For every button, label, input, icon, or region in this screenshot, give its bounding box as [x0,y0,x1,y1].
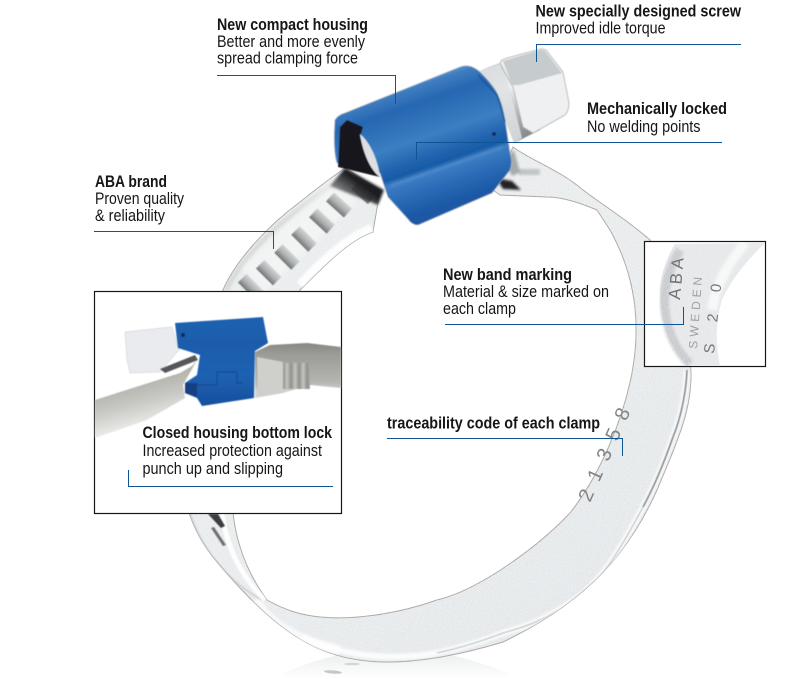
inset left band [95,360,197,438]
callout: ABA brand: ABA brand [95,172,167,191]
band slots [238,183,374,299]
dark shadow beneath housing [330,168,384,205]
inset callout: Closed housing bottom lock [142,423,332,442]
inset callout [128,423,333,486]
callout: new compact housing [217,15,396,104]
embossed marking text: SWEDEN [686,276,705,349]
inset callout: punch up and slipping [142,460,283,478]
callout: traceability code: traceability code of each clamp [387,414,600,432]
blue housing [334,66,512,225]
zoom panel: band marking detail [644,242,766,366]
callout: new band marking [443,265,684,324]
callout: mechanically locked: No welding points [587,118,700,136]
callout: new band marking: New band marking [443,265,572,284]
lower band slashes [208,514,226,546]
embossed marking text: ABA [665,256,688,300]
callout: traceability code [387,414,622,456]
inset panel: closed housing bottom lock [94,292,342,514]
callout: specially designed screw [536,2,742,62]
inset screw head [125,327,179,373]
callout: new compact housing: Better and more evenly [217,33,366,51]
callout: ABA brand: Proven quality [95,190,185,208]
embossed marking text: S 2 0 [701,283,725,354]
inset right band [255,343,341,398]
inset callout: Increased protection against [142,442,322,460]
reflection under clamp [270,649,522,679]
housing opening [338,120,380,177]
callout: new band marking: Material & size marked on [443,283,609,301]
housing ridge highlight [391,147,503,186]
callout: specially designed screw: Improved idle torque [536,20,666,38]
callout: mechanically locked: Mechanically locked [587,99,727,118]
callout: mechanically locked [416,99,727,160]
embossed traceability number: 21358 [574,405,635,505]
callout: new compact housing: New compact housing [217,15,368,34]
screw end in opening [360,134,380,177]
embossed marking text [665,256,725,354]
callout: specially designed screw: New specially designed screw [536,2,742,20]
callout: ABA brand [94,172,274,249]
tail strap shading [496,150,540,190]
callout: ABA brand: & reliability [95,207,166,225]
clamp band ring [180,140,700,670]
callout: new band marking: each clamp [443,300,516,318]
inset band tip [160,355,198,373]
inset blue housing [175,317,268,406]
callout: new compact housing: spread clamping force [217,50,358,68]
screw head and shaft [478,49,569,143]
